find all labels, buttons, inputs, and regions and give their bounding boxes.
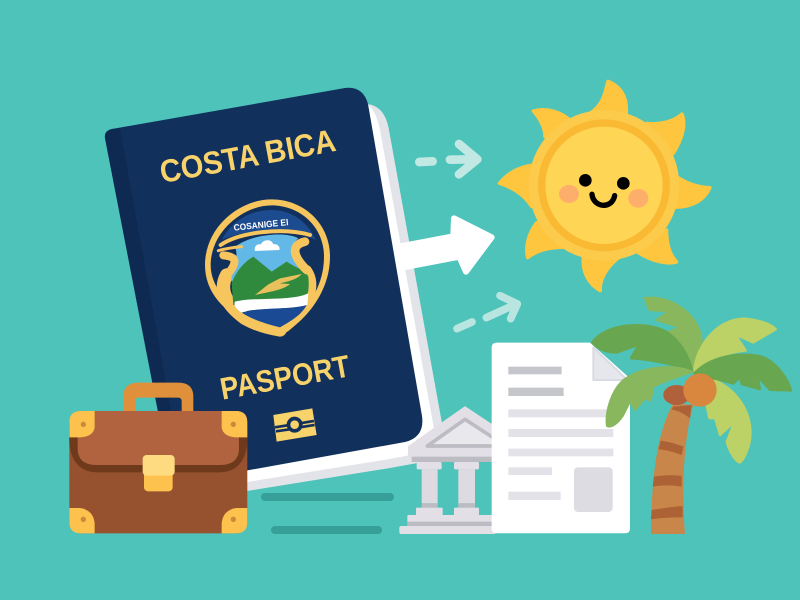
- palm back coconut: [663, 385, 690, 405]
- large white arrow: [393, 218, 492, 272]
- palm trunk: [651, 403, 693, 534]
- emblem river: [235, 293, 308, 313]
- emblem motto: COSANIGE EI: [233, 217, 289, 233]
- briefcase handle: [123, 383, 193, 413]
- sun disc: [529, 110, 679, 261]
- icon: briefcase: [69, 383, 247, 533]
- sun face: [559, 174, 648, 208]
- icon: bank building: [399, 407, 497, 534]
- dashed arrow upper: [419, 144, 477, 174]
- passport label: PASPORT: [217, 348, 353, 407]
- emblem cloud: [255, 240, 280, 251]
- icon: palm tree: [592, 298, 791, 534]
- corner rivets: [81, 422, 236, 522]
- sun rays: [499, 81, 710, 291]
- briefcase corners: [69, 411, 247, 533]
- briefcase flap: [78, 411, 239, 465]
- passport title: COSTA BICA: [157, 122, 338, 190]
- frond left mid: [607, 367, 693, 427]
- emblem golden field: [255, 274, 302, 295]
- document photo box: [574, 467, 613, 512]
- briefcase clasp: [143, 455, 175, 491]
- coat of arms emblem: [205, 199, 330, 334]
- frond right dark: [694, 355, 791, 391]
- emblem banner: [222, 210, 316, 240]
- ground shadows: [261, 493, 394, 534]
- passport chip symbol: [273, 408, 317, 442]
- emblem lower gold band: [223, 270, 311, 330]
- emblem water: [242, 305, 307, 327]
- passport pages: [240, 100, 445, 491]
- frond right light: [694, 318, 776, 372]
- document fold: [593, 347, 627, 380]
- frond left dark: [592, 325, 693, 372]
- frond lower right: [707, 380, 751, 463]
- passport spine: [105, 128, 184, 484]
- emblem gold scrolls: [218, 231, 310, 275]
- dashed arrow lower: [457, 296, 517, 329]
- icon: sun: [499, 81, 710, 291]
- briefcase flap border: [69, 411, 247, 472]
- document text lines: [508, 367, 613, 500]
- emblem sky: [231, 235, 308, 282]
- icon: document: [492, 343, 630, 533]
- briefcase body: [69, 411, 247, 533]
- trunk bands: [651, 405, 692, 519]
- passport cover: [105, 88, 422, 484]
- frond back top: [645, 298, 702, 372]
- emblem mountains: [232, 257, 309, 305]
- palm coconut: [683, 373, 717, 407]
